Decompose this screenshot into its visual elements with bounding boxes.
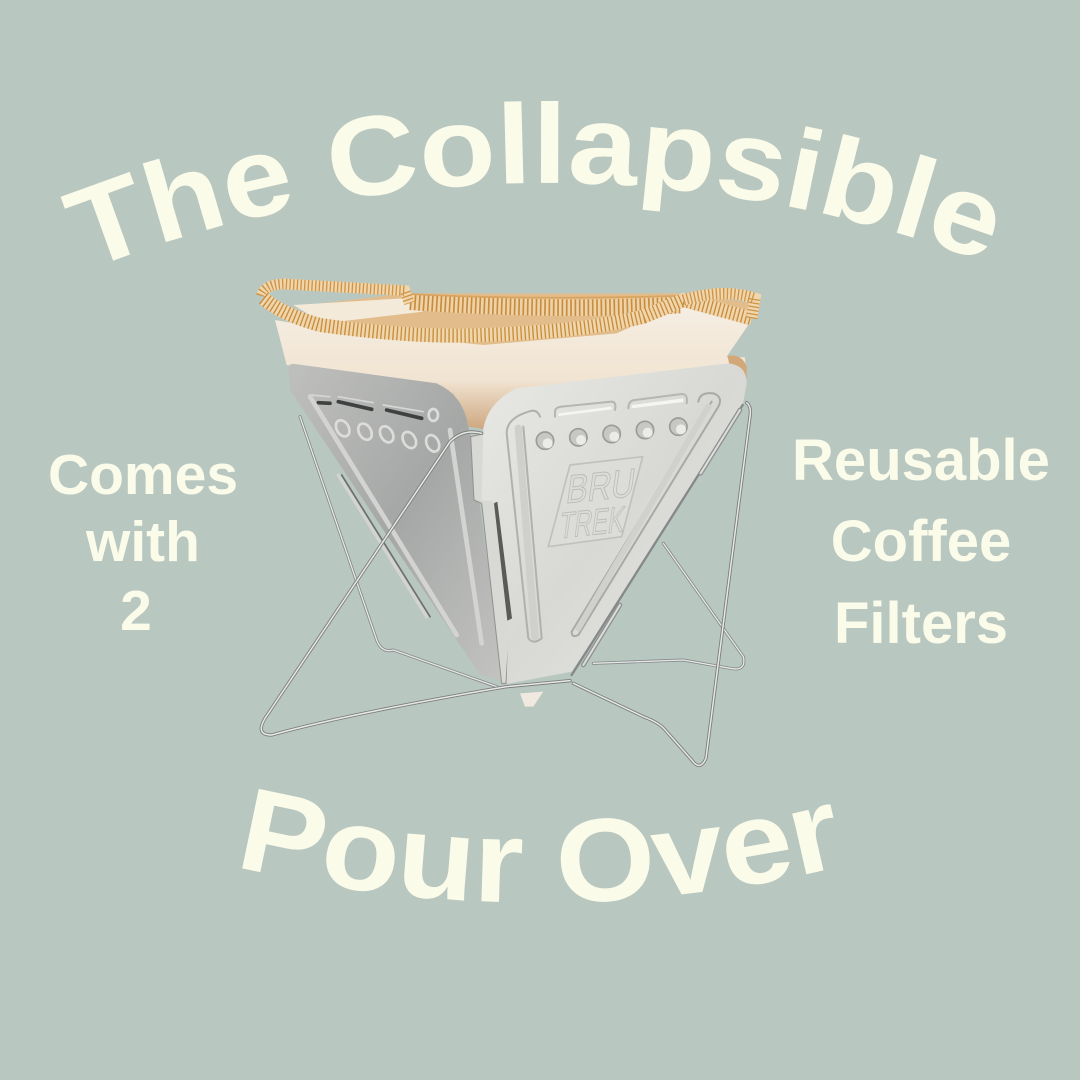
- BruTrek logo: [548, 457, 643, 547]
- right label: Reusable Coffee Filters: Filters: [834, 591, 1008, 656]
- right metal panel: [482, 363, 747, 684]
- cloth filter: [261, 284, 755, 430]
- rear wire legs: [300, 417, 744, 687]
- hinge shadow strip: [494, 502, 512, 621]
- front wire legs: [261, 403, 750, 765]
- BruTrek logo: BRU: [564, 461, 638, 512]
- BruTrek logo: TREK: [557, 498, 628, 546]
- left label: Comes with 2: [48, 443, 238, 643]
- right label: Reusable Coffee Filters: Reusable: [792, 428, 1050, 493]
- back stitching: [410, 302, 680, 308]
- title: Pour Over: Pour Over: [242, 788, 834, 902]
- front stitching: [261, 284, 409, 303]
- left label: Comes with 2: with: [85, 510, 200, 574]
- right label: Reusable Coffee Filters: [792, 428, 1050, 656]
- title: The Collapsible: The Collapsible: [60, 101, 996, 261]
- left panel slots: [310, 395, 482, 643]
- right label: Reusable Coffee Filters: Coffee: [831, 509, 1011, 574]
- right panel slots and holes: [507, 393, 720, 642]
- left label: Comes with 2: Comes: [48, 443, 238, 507]
- left label: Comes with 2: 2: [120, 579, 152, 643]
- left metal panel: [288, 364, 503, 680]
- product: collapsible pour over dripper: [261, 284, 755, 765]
- hinge: [471, 433, 510, 683]
- filter tip: [520, 692, 543, 707]
